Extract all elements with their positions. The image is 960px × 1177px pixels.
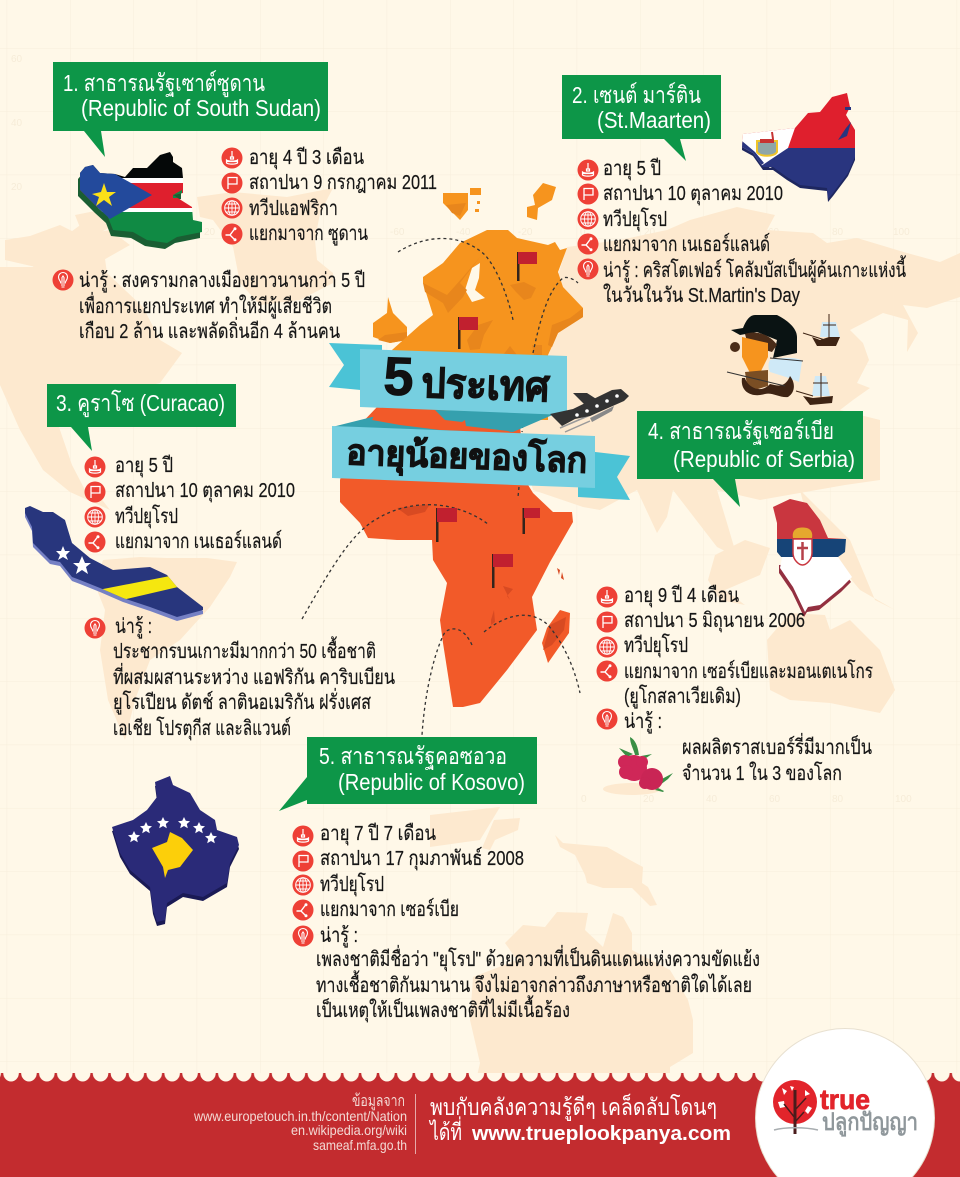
- footer call to action: ได้ที่: [428, 1116, 462, 1145]
- faint grid coordinate labels: 0: [580, 227, 586, 238]
- callout: Curacao heading: [47, 384, 236, 451]
- fun fact: Serbia: ผลผลิตราสเบอร์รี่มีมากเป็น: [682, 733, 872, 759]
- fun fact: Curacao: เอเชีย โปรตุกีส และลิแวนต์: [113, 716, 291, 741]
- faint grid coordinate labels: -160: [71, 227, 91, 238]
- footer sources: [193, 1092, 407, 1153]
- panel: St. Maarten: [562, 75, 906, 405]
- fact: age, founded, continent, origin: สถาปนา 10 ตุลาคม 2010: [603, 182, 783, 206]
- fact: age, founded, continent, origin: [84, 454, 295, 553]
- panel: South Sudan: [52, 62, 437, 343]
- callout: Kosovo heading: (Republic of Kosovo): [338, 769, 525, 795]
- faint grid coordinate labels: 0: [581, 794, 587, 805]
- dashed route arcs: [302, 238, 580, 735]
- fact: age, founded, continent, origin: ทวีปยุโรป: [624, 633, 688, 658]
- flag map: Serbia: [773, 499, 852, 617]
- footer call to action: พบกับคลังความรู้ดีๆ เคล็ดลับโดนๆ: [430, 1092, 717, 1121]
- fun fact: Kosovo: ทางเชื้อชาติกันมานาน จึงไม่อาจกล่าวถึงภาษาหรือชาติใดได้เลย: [316, 970, 752, 997]
- callout: Curacao heading: 3. คูราโซ (Curacao): [56, 390, 225, 418]
- callout: Kosovo heading: 5. สาธารณรัฐคอซอวอ: [319, 743, 507, 770]
- faint grid coordinate labels: 80: [832, 227, 844, 238]
- logo: True Plookpanya: true: [820, 1084, 870, 1115]
- faint grid coordinate labels: -40: [456, 227, 471, 238]
- title ribbon: [329, 343, 630, 500]
- footer sources: sameaf.mfa.go.th: [313, 1137, 407, 1153]
- faint grid coordinate labels: 60: [769, 794, 781, 805]
- fun fact: Kosovo: เพลงชาติมีชื่อว่า "ยุโรป" ด้วยความที่เป็นดินแดนแห่งความขัดแย้ง: [316, 945, 760, 972]
- footer sources: www.europetouch.in.th/content/Nation: [193, 1108, 407, 1124]
- flag map: Kosovo: [112, 776, 239, 926]
- logo: tree: [773, 1080, 818, 1134]
- fact: age, founded, continent, origin: อายุ 5 ปี: [603, 157, 661, 181]
- callout: St. Maarten heading: (St.Maarten): [597, 107, 711, 133]
- fact: age, founded, continent, origin: แยกมาจาก เซอร์เบีย: [320, 898, 459, 921]
- footer call to action: [428, 1092, 731, 1145]
- faint grid coordinate labels: 40: [706, 794, 718, 805]
- fun fact: Serbia: น่ารู้ :: [624, 710, 662, 734]
- title line 1: 5: [383, 346, 415, 407]
- fact: age, founded, continent, origin: ทวีปแอฟริกา: [249, 197, 338, 220]
- logo: True Plookpanya: [755, 1028, 935, 1177]
- faint grid coordinate labels: 100: [893, 227, 910, 238]
- map: Europe in orange: [373, 183, 583, 420]
- panel: Serbia: [596, 411, 873, 795]
- faint grid coordinate labels: 20: [644, 227, 656, 238]
- fun fact: South Sudan: เพื่อการแยกประเทศ ทำให้มีผู้เสียชีวิต: [79, 292, 332, 319]
- title line 1: [383, 346, 551, 412]
- fun fact: St. Maarten: [578, 255, 906, 307]
- fact: age, founded, continent, origin: ทวีปยุโรป: [115, 504, 178, 529]
- callout: Kosovo heading: [279, 737, 537, 811]
- fact: age, founded, continent, origin: แยกมาจาก ซูดาน: [249, 222, 368, 246]
- fact: age, founded, continent, origin: (ยูโกสลาเวียเดิม): [624, 684, 741, 709]
- icon: airplane: [550, 389, 629, 432]
- faint grid coordinate labels: 60: [11, 54, 23, 65]
- fun fact: Kosovo: [292, 924, 760, 1023]
- footer band: [0, 1073, 960, 1177]
- panel: Kosovo: [112, 737, 760, 1023]
- callout: Serbia heading: [637, 411, 863, 507]
- fun fact: Curacao: น่ารู้ :: [115, 615, 152, 639]
- fun fact: Curacao: ที่ผสมผสานระหว่าง แอฟริกัน คาริบเบียน: [113, 663, 395, 689]
- fun fact: Curacao: [84, 615, 395, 741]
- fact: age, founded, continent, origin: สถาปนา 10 ตุลาคม 2010: [115, 479, 295, 503]
- flag map: St. Maarten: [742, 93, 855, 202]
- fact: age, founded, continent, origin: สถาปนา 9 กรกฎาคม 2011: [249, 171, 437, 194]
- background world map: [0, 188, 960, 1076]
- faint grid coordinate labels: 60: [768, 227, 780, 238]
- fact: age, founded, continent, origin: สถาปนา 5 มิถุนายน 2006: [624, 609, 805, 633]
- fun fact: St. Maarten: ในวันในวัน St.Martin's Day: [603, 283, 801, 307]
- fact: age, founded, continent, origin: [596, 584, 873, 709]
- faint grid coordinate labels: 20: [204, 227, 216, 238]
- logo: True Plookpanya: ปลูกปัญญา: [822, 1109, 918, 1137]
- fact: age, founded, continent, origin: อายุ 7 ปี 7 เดือน: [320, 822, 436, 846]
- callout: St. Maarten heading: [562, 75, 721, 161]
- fact: age, founded, continent, origin: ทวีปยุโรป: [320, 872, 384, 897]
- faint grid coordinate labels: 40: [11, 118, 23, 129]
- footer sources: en.wikipedia.org/wiki: [291, 1122, 407, 1138]
- title line 1: ประเทศ: [421, 360, 551, 410]
- callout: South Sudan heading: (Republic of South Sudan): [81, 95, 321, 121]
- fact: age, founded, continent, origin: [222, 146, 437, 246]
- fun fact: South Sudan: [52, 269, 365, 343]
- faint grid coordinate labels: 100: [895, 794, 912, 805]
- fact: age, founded, continent, origin: สถาปนา 17 กุมภาพันธ์ 2008: [320, 847, 524, 871]
- fun fact: Kosovo: น่ารู้ :: [320, 924, 358, 948]
- faint grid coordinate labels: 20: [11, 182, 23, 193]
- fun fact: Curacao: ประชากรบนเกาะมีมากกว่า 50 เชื้อชาติ: [113, 636, 376, 663]
- fact: age, founded, continent, origin: แยกมาจาก เนเธอร์แลนด์: [603, 233, 770, 256]
- title line 2: อายุน้อยของโลก: [346, 431, 588, 482]
- fun fact: South Sudan: เกือบ 2 ล้าน และพลัดถิ่นอีก 4 ล้านคน: [79, 317, 340, 343]
- footer sources: ข้อมูลจาก: [352, 1092, 405, 1111]
- map: Africa in red-orange: [340, 406, 573, 707]
- flag map: South Sudan: [78, 152, 202, 249]
- faint grid coordinate labels: -20: [518, 227, 533, 238]
- fact: age, founded, continent, origin: [292, 822, 524, 921]
- fun fact: Serbia: จำนวน 1 ใน 3 ของโลก: [682, 761, 842, 785]
- fun fact: South Sudan: น่ารู้ : สงครามกลางเมืองยาวนานกว่า 5 ปี: [79, 269, 365, 293]
- fact: age, founded, continent, origin: ทวีปยุโรป: [603, 207, 667, 232]
- map flags: [436, 252, 540, 588]
- panel: Curacao: [20, 384, 395, 741]
- callout: South Sudan heading: [53, 62, 328, 157]
- callout: St. Maarten heading: 2. เซนต์ มาร์ติน: [572, 82, 701, 108]
- fun fact: Serbia: [596, 708, 872, 785]
- fact: age, founded, continent, origin: แยกมาจาก เนเธอร์แลนด์: [115, 530, 282, 553]
- fact: age, founded, continent, origin: อายุ 4 ปี 3 เดือน: [249, 146, 364, 170]
- faint grid coordinate labels: -60: [390, 227, 405, 238]
- illustration: Columbus and ships: [727, 314, 840, 405]
- callout: Serbia heading: (Republic of Serbia): [673, 446, 855, 472]
- callout: South Sudan heading: 1. สาธารณรัฐเซาต์ซูดาน: [63, 70, 265, 98]
- illustration: raspberries: [603, 737, 673, 795]
- footer call to action: www.trueplookpanya.com: [471, 1123, 731, 1145]
- fact: age, founded, continent, origin: [578, 157, 783, 256]
- fact: age, founded, continent, origin: อายุ 5 ปี: [115, 454, 173, 478]
- faint grid coordinate labels: 80: [832, 794, 844, 805]
- faint grid coordinate labels: [11, 54, 912, 805]
- fun fact: Curacao: ยูโรเปียน ดัตช์ ลาตินอเมริกัน ฝรั่งเศส: [113, 688, 371, 715]
- fact: age, founded, continent, origin: แยกมาจาก เซอร์เบียและมอนเตเนโกร: [624, 659, 873, 683]
- flag map: Curacao: [25, 506, 203, 621]
- fact: age, founded, continent, origin: อายุ 9 ปี 4 เดือน: [624, 584, 739, 608]
- faint grid coordinate labels: 20: [643, 794, 655, 805]
- fun fact: Kosovo: เป็นเหตุให้เป็นเพลงชาติที่ไม่มีเนื้อร้อง: [316, 995, 570, 1023]
- callout: Serbia heading: 4. สาธารณรัฐเซอร์เบีย: [648, 418, 834, 445]
